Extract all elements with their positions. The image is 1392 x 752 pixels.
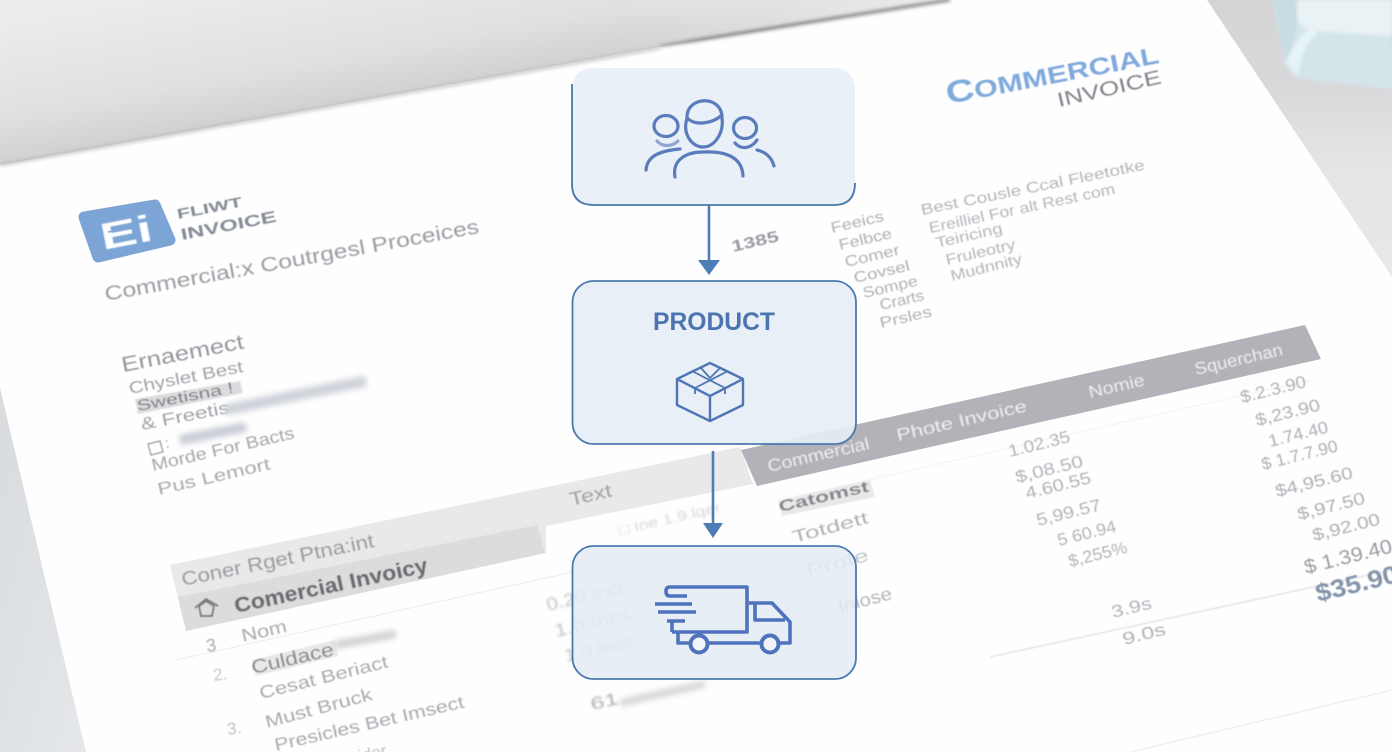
middle column entries under card: 1.0 lnoc	[562, 631, 635, 666]
number: 1385: 1385	[730, 229, 781, 256]
right table row labels: Prote	[804, 545, 871, 581]
details labels column: Prsles	[878, 303, 934, 332]
brand name: FLIWT	[176, 194, 244, 222]
icon: house	[195, 599, 218, 616]
price column two: $ 1.39.40	[1302, 536, 1392, 579]
details values column: Best Cousle Ccal Fleetotke	[919, 157, 1146, 219]
details values column	[919, 157, 1146, 285]
price column one: 5 60.94	[1055, 517, 1118, 550]
details labels column: Crarts	[878, 287, 926, 314]
left table rows: Cesat Beriact	[257, 652, 390, 703]
blurred row smear	[335, 634, 396, 645]
brand name	[176, 194, 278, 244]
right table header band: Commercial	[766, 434, 871, 476]
price column two: $35.90	[1313, 560, 1392, 608]
price column two: $4,95.60	[1273, 463, 1355, 501]
sender address block: :	[164, 434, 170, 451]
sender address block: Chyslet Best	[127, 358, 245, 398]
title: commercial invoice: COMMERCIAL	[943, 35, 1161, 111]
brand name: INVOICE	[180, 209, 278, 244]
left table rows: Nom	[239, 616, 289, 646]
price column one: 1.02.35	[1006, 427, 1072, 461]
right table header band	[741, 325, 1321, 486]
left table rows: 2.	[212, 664, 229, 685]
left table rows: 3.	[226, 718, 243, 739]
price column one: 9.0s	[1120, 620, 1168, 649]
icon: delivery truck	[655, 587, 790, 652]
card: delivery	[572, 546, 856, 679]
price column one: $,08.50	[1013, 452, 1085, 487]
price column one: 3.9s	[1109, 594, 1154, 622]
price column two: $ 1.7.7.90	[1259, 437, 1340, 474]
price column two: $,92.00	[1310, 510, 1382, 545]
sender address block: Pus Lemort	[156, 454, 272, 499]
sender address block: Morde For Bacts	[150, 424, 296, 475]
right table header band: Nomie	[1087, 371, 1146, 402]
blurred address smears	[180, 381, 366, 440]
left table rows: Must Bruck	[263, 684, 375, 732]
sender address block: Swetisna !	[136, 380, 235, 415]
sender address block: Ernaemect	[120, 331, 246, 377]
subtitle: Commercial:x Coutrgesl Proceices	[103, 215, 481, 306]
label: product: PRODUCT	[653, 308, 775, 336]
middle column entries under card: □ Ine 1.9.lqer	[617, 499, 722, 538]
title: commercial invoice	[943, 35, 1163, 112]
logo: EI badge	[84, 205, 170, 258]
middle column entries under card: 0.20 incl	[544, 578, 625, 615]
left table header bands: Coner Rget Ptna:int	[180, 530, 377, 591]
left table header bands: Text	[567, 481, 614, 510]
price column one: 5,99.57	[1034, 495, 1103, 530]
logo: EI badge: Ei	[97, 208, 156, 258]
details values column: Teiricing	[934, 220, 1004, 252]
price column one	[1006, 427, 1168, 649]
details values column: Mudnnity	[949, 251, 1024, 285]
arrow: customer to product	[698, 205, 720, 275]
card: product	[572, 281, 856, 444]
price column two: $,97.50	[1295, 489, 1367, 524]
price column two	[1238, 372, 1392, 608]
left table rows	[205, 616, 466, 752]
right table row labels: Totdett	[790, 508, 871, 547]
details labels column: Felbce	[837, 225, 894, 254]
middle column entries under card	[544, 499, 722, 714]
middle column entries under card: 61	[589, 689, 620, 714]
object: pale blue block	[1273, 0, 1392, 89]
price column two: $,23.90	[1253, 395, 1322, 430]
left table rows: 3	[205, 635, 217, 656]
details labels column: Sompe	[861, 273, 919, 302]
right table row labels	[777, 479, 894, 617]
icon: box	[677, 363, 743, 421]
price column two: 1.74.40	[1266, 418, 1330, 451]
right table row labels: Catomst	[777, 479, 871, 516]
details labels column: Comer	[843, 242, 901, 271]
title: commercial invoice: INVOICE	[1055, 67, 1163, 112]
price column one: $,255%	[1066, 538, 1129, 571]
details labels column: Feeics	[829, 208, 886, 237]
details values column: Ereilliel For alt Rest com	[927, 181, 1117, 237]
card: customers	[572, 68, 855, 205]
left table rows: Culdace	[249, 640, 336, 679]
right table header band: Squerchan	[1193, 340, 1285, 379]
left table header bands: Comercial Invoicy	[232, 554, 430, 618]
sender address block	[120, 331, 296, 499]
right table header band: Phote Invoice	[895, 396, 1028, 445]
right table row labels: Inlose	[836, 583, 894, 617]
price column two: $.2.3.90	[1238, 372, 1308, 407]
details values column: Fruleotry	[944, 236, 1018, 269]
details labels column	[829, 208, 934, 332]
sender address block: & Freetis	[139, 398, 231, 434]
price column one: 4.60.55	[1023, 468, 1093, 503]
icon: three people	[646, 101, 774, 177]
middle column entries under card: 1.0 fncs	[552, 604, 633, 641]
arrow: product to delivery	[703, 451, 723, 538]
left table header bands	[170, 447, 753, 631]
details labels column: Covsel	[852, 258, 911, 287]
